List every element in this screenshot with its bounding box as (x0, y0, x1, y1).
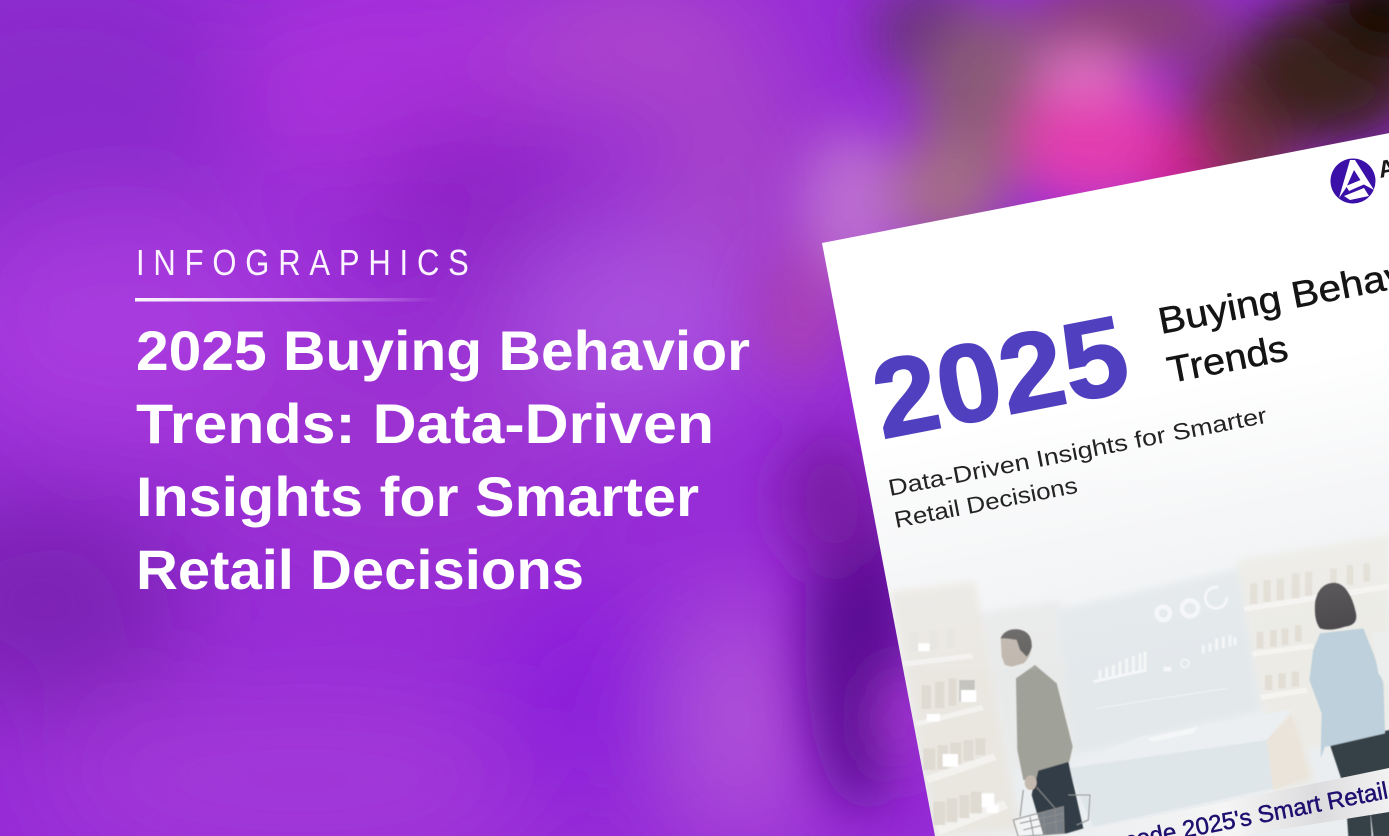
gradient rule under label (135, 298, 438, 302)
category label: INFOGRAPHICS (136, 244, 469, 284)
2025 heading numeral: 2025 (863, 292, 1138, 463)
main title: Retail Decisions (136, 538, 584, 601)
shopping basket (1013, 787, 1090, 836)
main title (136, 319, 750, 601)
report cover card (800, 120, 1389, 836)
cover subtitle: Data-Driven Insights for Smarter (886, 402, 1269, 501)
wall screen charts (1093, 587, 1235, 708)
man figure (1001, 629, 1083, 835)
cover heading (1159, 270, 1389, 382)
right shelves (1243, 563, 1388, 700)
cover subtitle (889, 410, 1266, 528)
store photo (890, 535, 1389, 836)
counter (1067, 709, 1308, 827)
main title: Insights for Smarter (136, 465, 699, 528)
bottom banner (1128, 768, 1389, 836)
left shelves (902, 628, 1008, 835)
top haze over photo (867, 480, 1354, 656)
icon: company logo (1330, 154, 1389, 204)
cover heading: Trends (1164, 327, 1291, 391)
main title: 2025 Buying Behavior (136, 319, 750, 382)
cover subtitle: Retail Decisions (892, 472, 1080, 533)
woman figure (1309, 583, 1389, 836)
main title: Trends: Data-Driven (136, 392, 714, 455)
card background (800, 120, 1389, 836)
